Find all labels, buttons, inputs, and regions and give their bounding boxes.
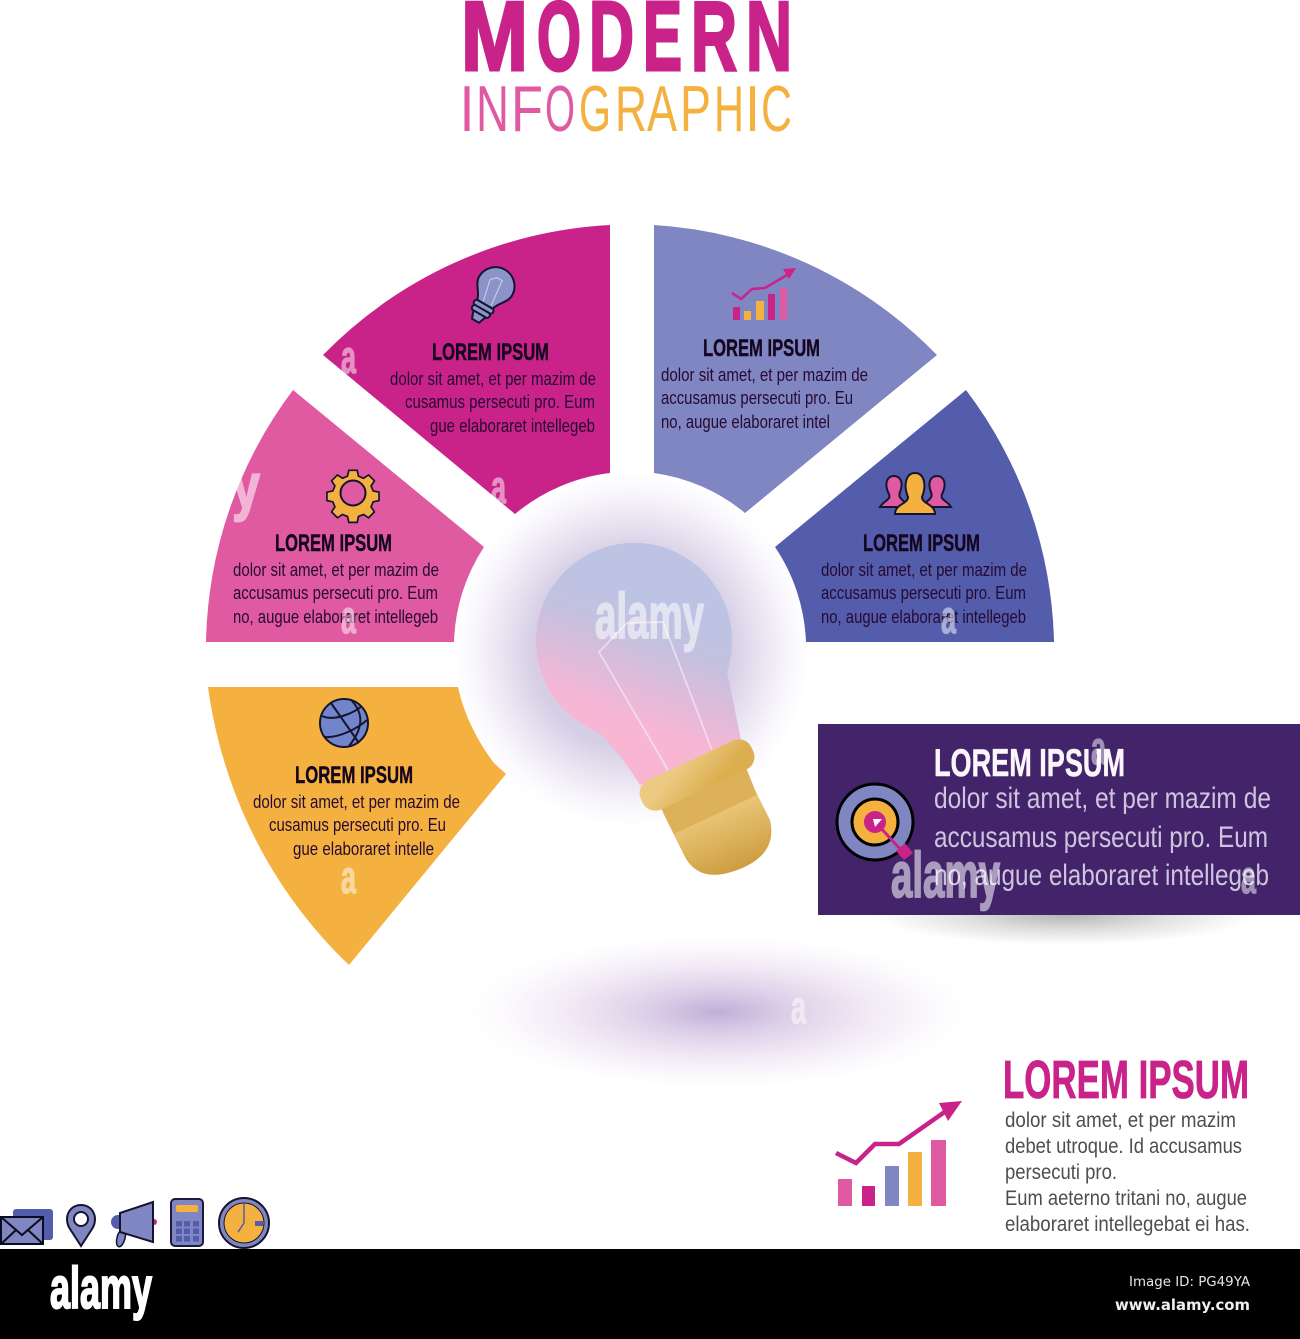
body text: Eum aeterno tritani no, augue	[1005, 1187, 1247, 1210]
body text	[233, 560, 439, 627]
title: G	[579, 72, 611, 145]
watermarks: alamy	[891, 839, 1000, 911]
icon: growth chart	[732, 268, 796, 320]
icon: mail	[1, 1209, 53, 1244]
central glow	[454, 472, 810, 828]
panel: indigo segment	[775, 390, 1054, 642]
bulb glass	[536, 543, 741, 785]
heading: LOREM IPSUM	[432, 339, 549, 366]
title: H	[714, 72, 744, 145]
watermarks: a	[341, 331, 356, 383]
body text	[661, 365, 868, 432]
body text	[390, 369, 596, 436]
body text: dolor sit amet, et per mazim de	[661, 365, 868, 385]
watermarks: a	[941, 591, 956, 643]
body text: no, augue elaboraret intel	[661, 412, 830, 432]
title: R	[615, 72, 647, 145]
icon: clock	[219, 1198, 269, 1248]
title: C	[761, 72, 792, 145]
body text: no, augue elaboraret intellegeb	[821, 607, 1026, 627]
icon: target	[837, 784, 913, 860]
title: F	[511, 72, 543, 145]
body text: accusamus persecuti pro. Eum	[233, 583, 438, 603]
icon: calculator	[171, 1199, 203, 1246]
icon: people	[880, 473, 951, 514]
body text: dolor sit amet, et per mazim de	[821, 560, 1027, 580]
website: www.alamy.com	[1115, 1296, 1250, 1314]
icon: gear	[327, 470, 379, 522]
central light bulb	[536, 543, 771, 875]
cap band	[660, 765, 757, 834]
watermarks: alamy	[595, 580, 704, 652]
watermarks: a	[1091, 722, 1106, 774]
watermarks: a	[1241, 851, 1256, 903]
title: O	[545, 72, 575, 145]
watermarks: a	[491, 461, 506, 513]
body text: dolor sit amet, et per mazim	[1005, 1109, 1236, 1132]
body text: elaboraret intellegebat ei has.	[1005, 1213, 1250, 1236]
panel: pink segment	[206, 390, 484, 642]
body text: dolor sit amet, et per mazim de	[390, 369, 596, 389]
title: A	[647, 72, 677, 145]
body text	[253, 792, 460, 859]
title: I	[745, 72, 760, 145]
body text: gue elaboraret intellegeb	[430, 416, 595, 436]
icon: light bulb	[459, 260, 521, 330]
body text: persecuti pro.	[1005, 1161, 1117, 1184]
body text: cusamus persecuti pro. Eum	[405, 392, 595, 412]
panel shadow	[875, 885, 1255, 945]
collar	[635, 735, 759, 815]
heading: LOREM IPSUM	[295, 762, 413, 789]
heading: LOREM IPSUM	[703, 335, 820, 362]
heading: LOREM IPSUM	[275, 530, 392, 557]
title: N	[476, 72, 509, 145]
body text: gue elaboraret intelle	[293, 839, 434, 859]
watermarks: a	[341, 591, 356, 643]
panel: purple callout	[818, 724, 1300, 915]
heading: LOREM IPSUM	[863, 530, 980, 557]
watermarks	[232, 331, 1256, 1033]
body text: accusamus persecuti pro. Eum	[821, 583, 1026, 603]
body text: dolor sit amet, et per mazim de	[253, 792, 460, 812]
body text	[1005, 1109, 1250, 1236]
body text: accusamus persecuti pro. Eu	[661, 388, 853, 408]
watermarks: a	[341, 851, 356, 903]
body text: debet utroque. Id accusamus	[1005, 1135, 1242, 1158]
icon: map pin	[67, 1205, 95, 1246]
body text	[934, 782, 1271, 892]
title: P	[680, 72, 711, 145]
image id: Image ID: PG49YA	[1129, 1275, 1250, 1290]
panel: magenta segment	[323, 225, 610, 514]
ground shadow	[468, 936, 968, 1088]
bottom growth chart	[836, 1101, 962, 1206]
footer bar	[0, 1249, 1300, 1339]
title: I	[460, 72, 474, 145]
title	[460, 0, 792, 145]
watermarks: y	[232, 450, 260, 522]
panel: yellow segment	[208, 687, 506, 965]
body text	[821, 560, 1027, 627]
body text: cusamus persecuti pro. Eu	[269, 815, 446, 835]
alamy logo: alamy	[50, 1256, 152, 1321]
icon: megaphone	[111, 1202, 157, 1248]
filament	[599, 622, 712, 770]
icon: globe	[320, 699, 368, 747]
watermarks: a	[791, 981, 806, 1033]
body text: dolor sit amet, et per mazim de	[233, 560, 439, 580]
body text: no, augue elaboraret intellegeb	[233, 607, 438, 627]
bulb cap	[663, 770, 771, 875]
panel: periwinkle segment	[654, 225, 937, 513]
heading: LOREM IPSUM	[934, 742, 1125, 785]
bottom-right text block	[1003, 1050, 1250, 1236]
